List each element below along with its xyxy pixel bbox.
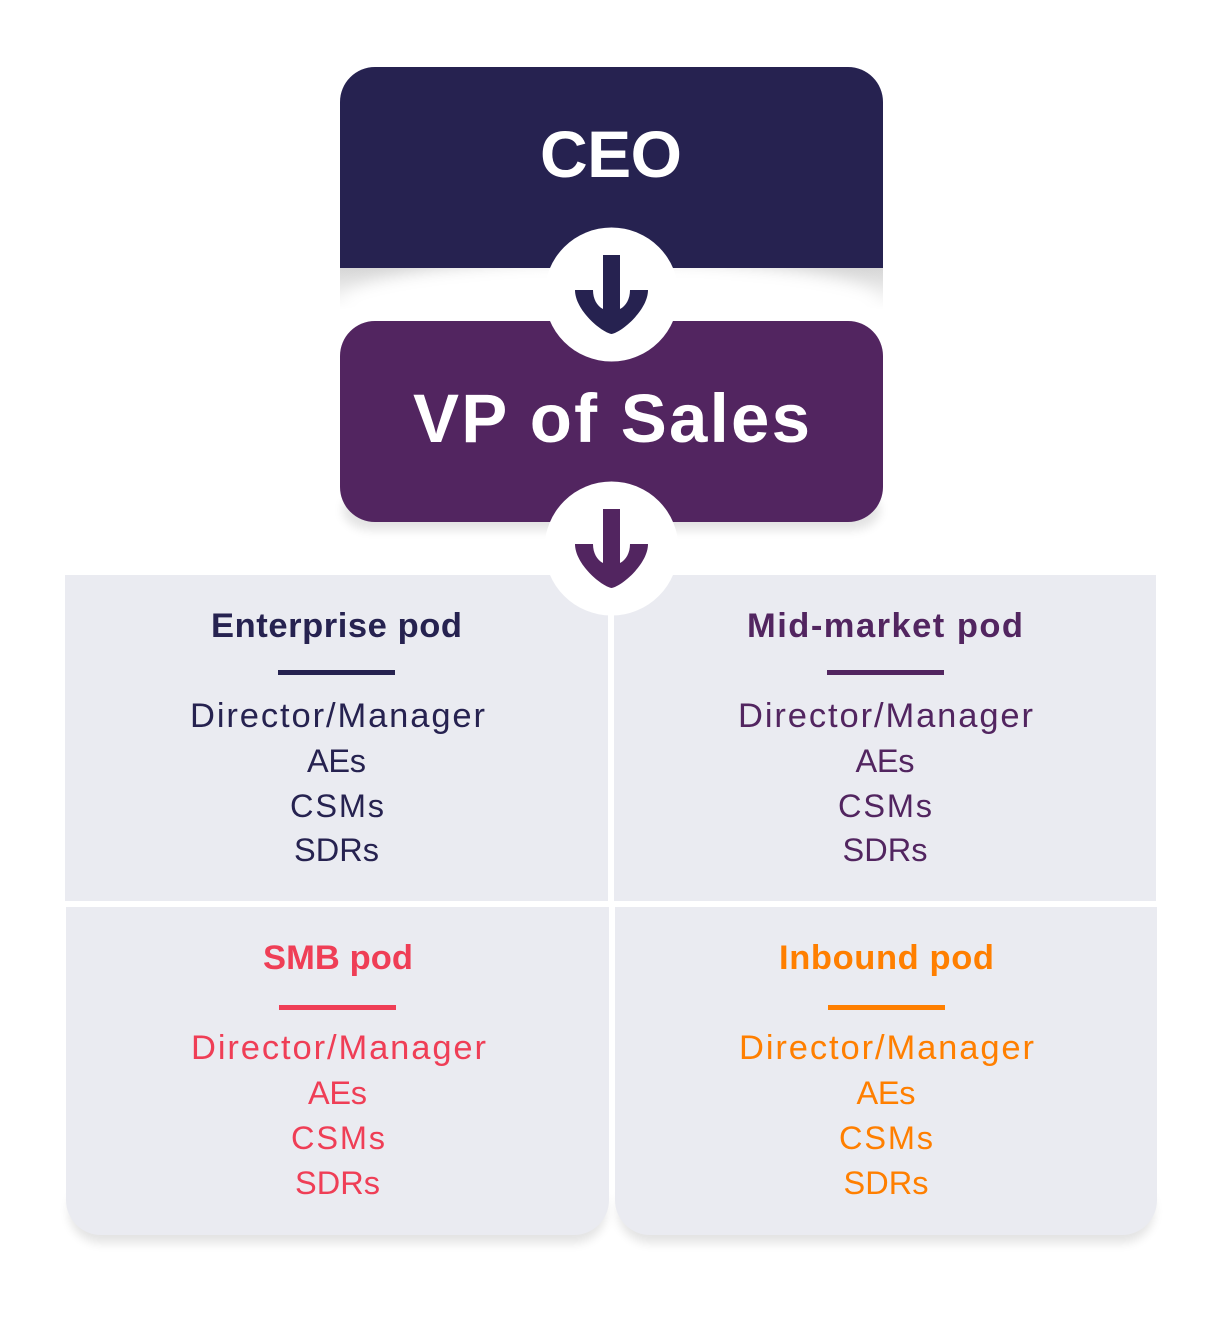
panel: VP of Sales bbox=[340, 321, 883, 522]
divider: Mid-market bbox=[827, 670, 944, 675]
heading: Mid-market pod: Mid-market pod bbox=[747, 607, 1023, 645]
roles: Mid-market bbox=[738, 697, 1033, 868]
roles: Mid-market: AEs bbox=[856, 743, 914, 779]
roles: Inbound bbox=[739, 1029, 1034, 1201]
shadow below CEO box bbox=[340, 268, 883, 298]
panel: Inbound pod bbox=[615, 907, 1157, 1235]
heading: Enterprise pod: Enterprise pod bbox=[211, 607, 462, 645]
heading: SMB pod: SMB pod bbox=[263, 939, 413, 977]
arrow: CEO to VP of Sales bbox=[544, 228, 678, 362]
panel: Enterprise pod bbox=[65, 575, 608, 901]
roles: SMB: CSMs bbox=[291, 1120, 385, 1156]
roles: Enterprise: Director/Manager bbox=[190, 697, 485, 735]
roles: Enterprise: CSMs bbox=[290, 788, 384, 824]
roles: Enterprise: SDRs bbox=[294, 832, 379, 868]
roles: SMB: SDRs bbox=[295, 1165, 380, 1201]
panel: CEO bbox=[340, 67, 883, 268]
roles: Mid-market: CSMs bbox=[838, 788, 932, 824]
divider: Enterprise bbox=[278, 670, 395, 675]
roles: Mid-market: SDRs bbox=[842, 832, 928, 868]
shadow below VP box bbox=[343, 490, 880, 530]
divider: Inbound bbox=[828, 1005, 945, 1010]
arrow: VP of Sales to pods bbox=[544, 482, 678, 616]
panel: Mid-market pod bbox=[614, 575, 1156, 901]
shadow below bottom pods bbox=[69, 1180, 1154, 1243]
roles: Enterprise bbox=[190, 697, 485, 868]
CEO label: CEO bbox=[540, 117, 682, 191]
roles: Inbound: Director/Manager bbox=[739, 1029, 1034, 1067]
VP of Sales label: VP of Sales bbox=[413, 380, 810, 457]
roles: Enterprise: AEs bbox=[307, 743, 366, 779]
roles: Mid-market: Director/Manager bbox=[738, 697, 1033, 735]
roles: Inbound: AEs bbox=[856, 1075, 916, 1111]
heading: Inbound pod: Inbound pod bbox=[779, 939, 994, 977]
roles: Inbound: CSMs bbox=[839, 1120, 933, 1156]
divider: SMB bbox=[279, 1005, 396, 1010]
roles: SMB: Director/Manager bbox=[191, 1029, 486, 1067]
panel: SMB pod bbox=[66, 907, 609, 1235]
roles: SMB: AEs bbox=[308, 1075, 367, 1111]
roles: SMB bbox=[191, 1029, 486, 1201]
roles: Inbound: SDRs bbox=[844, 1165, 928, 1201]
